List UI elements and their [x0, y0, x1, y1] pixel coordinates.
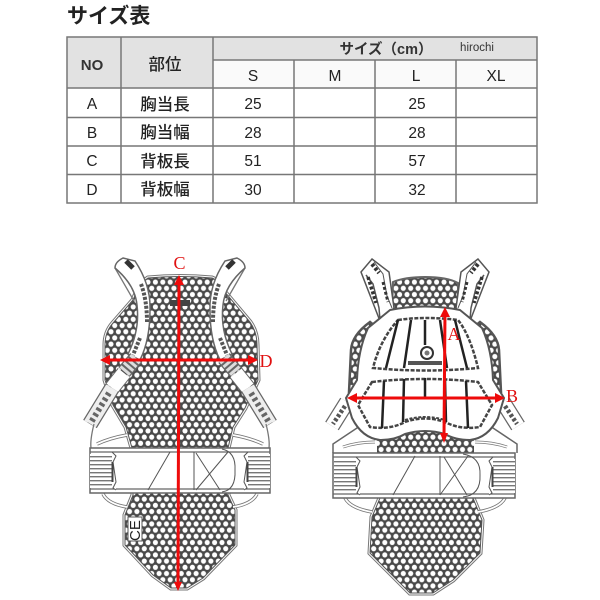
table grid	[67, 37, 537, 203]
row A: 25	[244, 96, 262, 113]
waist belt	[333, 453, 515, 498]
back protector diagram	[90, 253, 272, 591]
row D: 背板幅	[140, 180, 190, 199]
lower mesh panels	[370, 432, 482, 593]
row A: 25	[408, 96, 426, 113]
row A: A	[87, 96, 98, 113]
shoulder straps and side mesh	[332, 259, 518, 512]
row B: 28	[244, 125, 262, 142]
column headers: 部位	[148, 55, 182, 74]
column headers: M	[329, 68, 341, 85]
column headers: S	[248, 68, 258, 85]
table header shading	[67, 37, 537, 88]
row A	[87, 95, 426, 114]
row D: 32	[408, 182, 426, 199]
row D	[86, 180, 426, 199]
red arrow: D width	[100, 355, 258, 365]
row C: 背板長	[140, 152, 190, 171]
red arrow: B width	[347, 393, 505, 403]
row B	[87, 123, 426, 142]
logo plate	[170, 300, 190, 306]
row C	[86, 152, 426, 171]
column headers: サイズ（cm）	[339, 40, 433, 58]
row C: C	[86, 153, 98, 170]
column headers: L	[412, 68, 421, 85]
title: サイズ表	[67, 4, 150, 28]
waist belt	[90, 448, 270, 493]
row B: B	[87, 125, 97, 142]
shoulder straps	[90, 258, 270, 507]
top mesh	[392, 277, 458, 310]
red arrow: A height	[440, 307, 450, 443]
upper chest panel	[373, 318, 478, 370]
CE mark: CE	[127, 520, 144, 541]
column headers: NO	[81, 57, 104, 74]
column headers: XL	[487, 68, 506, 85]
column headers	[81, 40, 506, 85]
label D: D	[260, 351, 272, 371]
row B: 胸当幅	[140, 123, 190, 142]
chest shell	[346, 306, 504, 440]
lower chest panel	[358, 378, 492, 428]
row C: 57	[408, 153, 426, 170]
row B: 28	[408, 125, 426, 142]
size table	[67, 37, 537, 203]
label C: C	[173, 253, 186, 273]
red arrow: C height	[174, 275, 184, 591]
column headers: hirochi	[460, 42, 494, 54]
label B: B	[506, 386, 518, 406]
row D: D	[86, 182, 98, 199]
label A: A	[448, 324, 460, 344]
back plate mesh	[105, 276, 258, 588]
chest protector diagram	[332, 259, 518, 593]
row D: 30	[244, 182, 262, 199]
row A: 胸当長	[140, 95, 190, 114]
row C: 51	[244, 153, 262, 170]
